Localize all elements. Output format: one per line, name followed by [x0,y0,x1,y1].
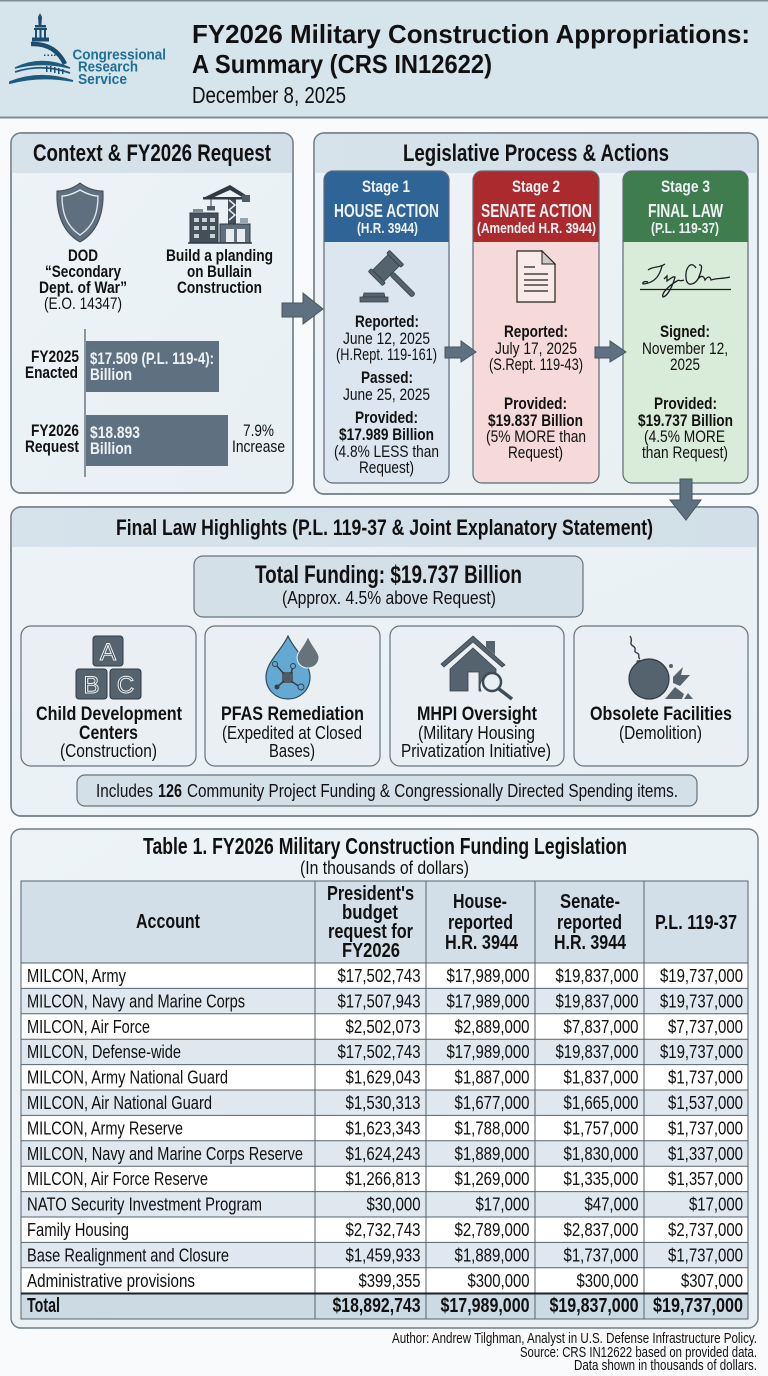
icon: ABC blocks [76,636,141,699]
row: Family Housing [27,1219,743,1240]
row: MILCON Air Force Reserve: $1,335,000 [564,1168,638,1189]
text: house dates and funding: Passed: [361,368,413,387]
icon: house with magnifier [441,636,512,699]
card: stage 1 house action: Stage 1 [362,177,410,196]
row: MILCON Army Reserve: $1,788,000 [454,1117,530,1138]
table header row: H.R. 3944 [554,932,627,954]
logo: Congressional Research Service: Congressional [72,48,166,64]
bar: FY2025 enacted: $17.509 (P.L. 119-4): [90,349,214,368]
row: MILCON Army: $19,837,000 [556,965,638,986]
card: child development centers: (Construction) [60,741,157,761]
row: MILCON Air Force Reserve: $1,266,813 [346,1168,420,1189]
card: stage 1 house action: HOUSE ACTION [334,201,439,221]
text: final law dates and funding: November 12, [642,339,728,358]
row: MILCON Navy and Marine Corps: $17,989,000 [446,990,530,1011]
heading: legislative process: Legislative Process & Actions [403,140,669,167]
row: Family Housing: $2,732,743 [346,1219,420,1240]
row: MILCON Army Reserve: $1,623,343 [346,1117,420,1138]
row: MILCON Army Reserve [27,1117,743,1138]
card: stage 2 senate action [473,171,599,483]
text: senate dates and funding: (5% MORE than [486,427,586,446]
panel: funding table [11,829,758,1328]
icon: gavel [360,250,424,306]
row: MILCON Navy and Marine Corps: $19,737,000 [660,990,743,1011]
row: MILCON Air National Guard: MILCON, Air National Guard [27,1092,212,1113]
arrow: stage 1 to stage 2 [445,341,476,362]
arrow: stage 2 to stage 3 [595,341,626,362]
card: stage 3 final law: (P.L. 119-37) [651,221,719,237]
heading: table title: Table 1. FY2026 Military Construction Funding Legislation [143,833,627,859]
row: MILCON Defense-wide [27,1041,743,1062]
card: stage 2 senate action: SENATE ACTION [481,201,592,221]
table: funding by account [21,881,748,1319]
row: Administrative provisions: $300,000 [468,1270,530,1291]
text: house dates and funding: (H.Rept. 119-161) [336,345,437,364]
icon: wrecking ball [629,636,693,699]
table header row: H.R. 3944 [445,932,519,954]
row: MILCON Navy and Marine Corps: $19,837,000 [556,990,638,1011]
row: Total [27,1295,743,1317]
row: MILCON Defense-wide: $17,502,743 [338,1041,420,1062]
row: MILCON Army: MILCON, Army [27,965,127,986]
row: NATO Security Investment Program: $17,000 [689,1194,743,1215]
callout: 126 community project items [77,775,697,806]
row: Total: $18,892,743 [332,1295,420,1317]
text: DOD Secondary Dept. of War: Dept. of War” [39,278,127,297]
table header row: budget [342,902,398,924]
heading: table title: (In thousands of dollars) [300,858,469,878]
card: stage 2 senate action: (Amended H.R. 3944) [477,221,596,237]
row: Total: $17,989,000 [440,1295,530,1317]
row: MILCON Air Force: $7,837,000 [564,1016,638,1037]
row: MILCON Defense-wide: $19,737,000 [660,1041,743,1062]
row: MILCON Air National Guard: $1,677,000 [454,1092,530,1113]
row: MILCON Air National Guard: $1,537,000 [668,1092,743,1113]
text: senate dates and funding: Request) [508,443,563,462]
card: PFAS remediation: Bases) [269,741,315,761]
card: obsolete facilities: Obsolete Facilities [590,703,732,725]
card: obsolete facilities: (Demolition) [619,723,702,743]
text: Build a planding: Construction [177,278,262,297]
row: MILCON Defense-wide: MILCON, Defense-wide [27,1041,181,1062]
row: MILCON Air Force: $2,889,000 [454,1016,530,1037]
card: stage 3 final law [623,171,748,483]
row: MILCON Army: $19,737,000 [660,965,743,986]
card: MHPI oversight: Privatization Initiative) [401,741,551,761]
row: MILCON Navy and Marine Corps: MILCON, Navy and Marine Corps [27,990,245,1011]
row: Administrative provisions: Administrative provisions [27,1270,195,1291]
row: MILCON Army National Guard: $1,629,043 [346,1067,420,1088]
card: PFAS remediation: (Expedited at Closed [222,723,362,743]
bar: FY2025 enacted: FY2025 [31,347,79,366]
text: house dates and funding: Provided: [355,408,418,427]
callout: 126 community project items: Includes [96,780,153,801]
text: senate dates and funding: July 17, 2025 [495,339,577,358]
footer: author and source notes [392,1331,757,1374]
card: child development centers: Child Development [36,703,182,725]
icon: ABC blocks: B [83,672,100,699]
row: MILCON Air Force Reserve: MILCON, Air Force Reserve [27,1168,208,1189]
text: senate dates and funding: Reported: [504,322,568,341]
logo: Congressional Research Service: Research [78,60,138,76]
row: MILCON Air Force: $7,737,000 [668,1016,743,1037]
row: MILCON Defense-wide: $19,837,000 [556,1041,638,1062]
row: NATO Security Investment Program [27,1194,743,1215]
row: NATO Security Investment Program: $47,000 [584,1194,638,1215]
header banner [0,0,768,118]
title: FY2026 Military Construction Appropriations: [192,19,750,49]
icon: document [517,251,555,302]
row: Total: $19,837,000 [550,1295,638,1317]
row: NATO Security Investment Program: $17,000 [476,1194,530,1215]
arrow: stage 3 to highlights [670,479,701,520]
card: MHPI oversight [390,626,564,766]
text: house dates and funding [334,312,439,477]
bar: FY2026 request: Request [25,437,79,456]
text: senate dates and funding: $19.837 Billion [488,411,583,430]
row: Base Realignment and Closure: $1,889,000 [454,1244,530,1265]
text: final law dates and funding: Provided: [654,394,717,413]
bar: FY2025 enacted: Enacted [25,363,78,382]
bar chart: FY2025 vs FY2026 [25,329,285,477]
icon: shield [57,183,103,242]
table header row: Senate- [560,891,620,913]
card: child development centers: Centers [79,722,138,744]
table header row: request for [328,921,413,943]
callout: 7.9% increase: Increase [232,437,285,456]
row: MILCON Army Reserve: $1,757,000 [564,1117,638,1138]
row: MILCON Army National Guard: $1,837,000 [564,1067,638,1088]
text: senate dates and funding: Provided: [504,394,567,413]
row: Base Realignment and Closure: $1,459,933 [346,1244,420,1265]
arrow: context to process [282,293,323,324]
logo: Congressional Research Service [10,13,166,88]
table header row: reported [557,912,622,934]
row: MILCON Air Force Reserve: $1,269,000 [454,1168,530,1189]
text: house dates and funding: June 25, 2025 [343,385,430,404]
icon: ABC blocks: C [117,672,134,699]
row: MILCON Navy and Marine Corps Reserve [27,1143,743,1164]
row: MILCON Army Reserve: $1,737,000 [668,1117,743,1138]
text: final law dates and funding: (4.5% MORE [644,427,725,446]
table header row: Account [136,911,200,933]
text: Build a planding: Build a planding [166,246,273,265]
icon: ABC blocks: A [100,639,116,666]
row: Administrative provisions: $300,000 [576,1270,638,1291]
text: DOD Secondary Dept. of War: DOD [68,246,98,265]
table header row: President's [327,883,414,905]
text: final law dates and funding: 2025 [670,355,700,374]
row: MILCON Navy and Marine Corps Reserve: $1,889,000 [454,1143,530,1164]
row: MILCON Air National Guard: $1,530,313 [346,1092,420,1113]
card: MHPI oversight: (Military Housing [418,723,535,743]
card: MHPI oversight: MHPI Oversight [417,703,537,725]
text: senate dates and funding [486,322,586,462]
row: NATO Security Investment Program: NATO Security Investment Program [27,1194,262,1215]
row: Family Housing: $2,789,000 [454,1219,530,1240]
panel: context and FY2026 request [11,133,293,493]
card: PFAS remediation: PFAS Remediation [221,703,364,725]
table header row: FY2026 [342,940,400,962]
icon: construction crane and building [188,185,252,243]
bar: FY2025 enacted [25,341,219,392]
row: MILCON Army National Guard [27,1067,743,1088]
card: stage 2 senate action: Stage 2 [512,177,560,196]
text: DOD Secondary Dept. of War: “Secondary [45,262,121,281]
heading: table title [143,833,627,878]
text: senate dates and funding: (S.Rept. 119-43) [489,355,583,374]
bar: FY2026 request: Billion [90,439,132,458]
row: MILCON Air National Guard [27,1092,743,1113]
row: MILCON Army National Guard: $1,887,000 [454,1067,530,1088]
text: house dates and funding: Request) [359,458,414,477]
row: Family Housing: $2,737,000 [668,1219,743,1240]
card: stage 1 house action: (H.R. 3944) [357,221,418,237]
row: Family Housing: Family Housing [27,1219,129,1240]
date: December 8, 2025 [192,82,346,108]
icon: water drops and molecule [266,636,319,699]
text: Build a planding: on Bullain [187,262,252,281]
card: stage 3 final law: Stage 3 [661,177,710,196]
row: MILCON Army National Guard: MILCON, Army National Guard [27,1067,228,1088]
text: house dates and funding: (4.8% LESS than [334,442,439,461]
callout: 126 community project items: Community Project Funding & Congressionally Directed Spending items. [187,780,678,801]
row: Administrative provisions: $307,000 [681,1270,743,1291]
row: MILCON Army [27,965,743,986]
text: final law dates and funding [638,322,733,462]
text: house dates and funding: June 12, 2025 [343,329,430,348]
row: MILCON Navy and Marine Corps Reserve: $1,624,243 [346,1143,420,1164]
text: house dates and funding: $17.989 Billion [339,425,434,444]
row: MILCON Army National Guard: $1,737,000 [668,1067,743,1088]
table header row: House- [453,891,507,913]
panel: final law highlights [11,507,758,816]
row: MILCON Army Reserve: MILCON, Army Reserve [27,1117,183,1138]
icon: signature [640,264,731,297]
row: NATO Security Investment Program: $30,000 [366,1194,420,1215]
row: MILCON Navy and Marine Corps Reserve: $1,830,000 [564,1143,638,1164]
row: Total: Total [27,1295,60,1317]
bar: FY2026 request [25,415,228,466]
row: Base Realignment and Closure: $1,737,000 [564,1244,638,1265]
row: Family Housing: $2,837,000 [564,1219,638,1240]
bar: FY2026 request: $18.893 [90,423,140,442]
title [192,19,750,79]
text: Build a planding [166,246,273,297]
card: stage 1 house action [324,171,449,483]
row: MILCON Air National Guard: $1,665,000 [564,1092,638,1113]
table header row: P.L. 119-37 [655,912,737,934]
row: Administrative provisions: $399,355 [358,1270,420,1291]
text: house dates and funding: Reported: [355,312,419,331]
table header row: reported [448,912,513,934]
card: PFAS remediation [205,626,380,766]
text: final law dates and funding: Signed: [660,322,710,341]
row: MILCON Air Force: MILCON, Air Force [27,1016,150,1037]
row: Base Realignment and Closure: Base Realignment and Closure [27,1244,229,1265]
row: Total: $19,737,000 [653,1295,743,1317]
row: Base Realignment and Closure [27,1244,743,1265]
callout: 7.9% increase [232,421,285,456]
row: MILCON Army: $17,989,000 [446,965,530,986]
row: MILCON Navy and Marine Corps: $17,507,943 [338,990,420,1011]
row: MILCON Navy and Marine Corps Reserve: MILCON, Navy and Marine Corps Reserve [27,1143,303,1164]
bar: FY2025 enacted: Billion [90,365,132,384]
row: MILCON Air Force [27,1016,743,1037]
row: MILCON Navy and Marine Corps Reserve: $1,337,000 [668,1143,743,1164]
row: MILCON Defense-wide: $17,989,000 [446,1041,530,1062]
row: MILCON Air Force Reserve [27,1168,743,1189]
table row backgrounds [21,963,748,1319]
callout: total funding: Total Funding: $19.737 Billion [255,561,522,589]
row: Base Realignment and Closure: $1,737,000 [668,1244,743,1265]
panel: legislative process [314,133,758,494]
text: DOD Secondary Dept. of War [39,246,127,313]
row: MILCON Air Force Reserve: $1,357,000 [668,1168,743,1189]
row: MILCON Navy and Marine Corps [27,990,743,1011]
logo: Congressional Research Service: Service [78,72,127,88]
row: Administrative provisions [27,1270,743,1291]
callout: 126 community project items: 126 [158,780,182,801]
callout: total funding [194,556,583,617]
row: MILCON Air Force: $2,502,073 [346,1016,420,1037]
table header row [21,881,748,963]
callout: total funding: (Approx. 4.5% above Request) [282,587,496,608]
title: A Summary (CRS IN12622) [192,49,492,79]
bar: FY2026 request: FY2026 [31,421,79,440]
card: child development centers [21,626,196,766]
row: MILCON Army: $17,502,743 [338,965,420,986]
heading: context: Context & FY2026 Request [33,140,271,167]
callout: 7.9% increase: 7.9% [243,421,274,440]
text: final law dates and funding: $19.737 Billion [638,411,733,430]
text: DOD Secondary Dept. of War: (E.O. 14347) [44,294,122,313]
text: final law dates and funding: than Request) [642,443,728,462]
card: obsolete facilities [574,626,748,766]
card: stage 3 final law: FINAL LAW [648,201,723,221]
